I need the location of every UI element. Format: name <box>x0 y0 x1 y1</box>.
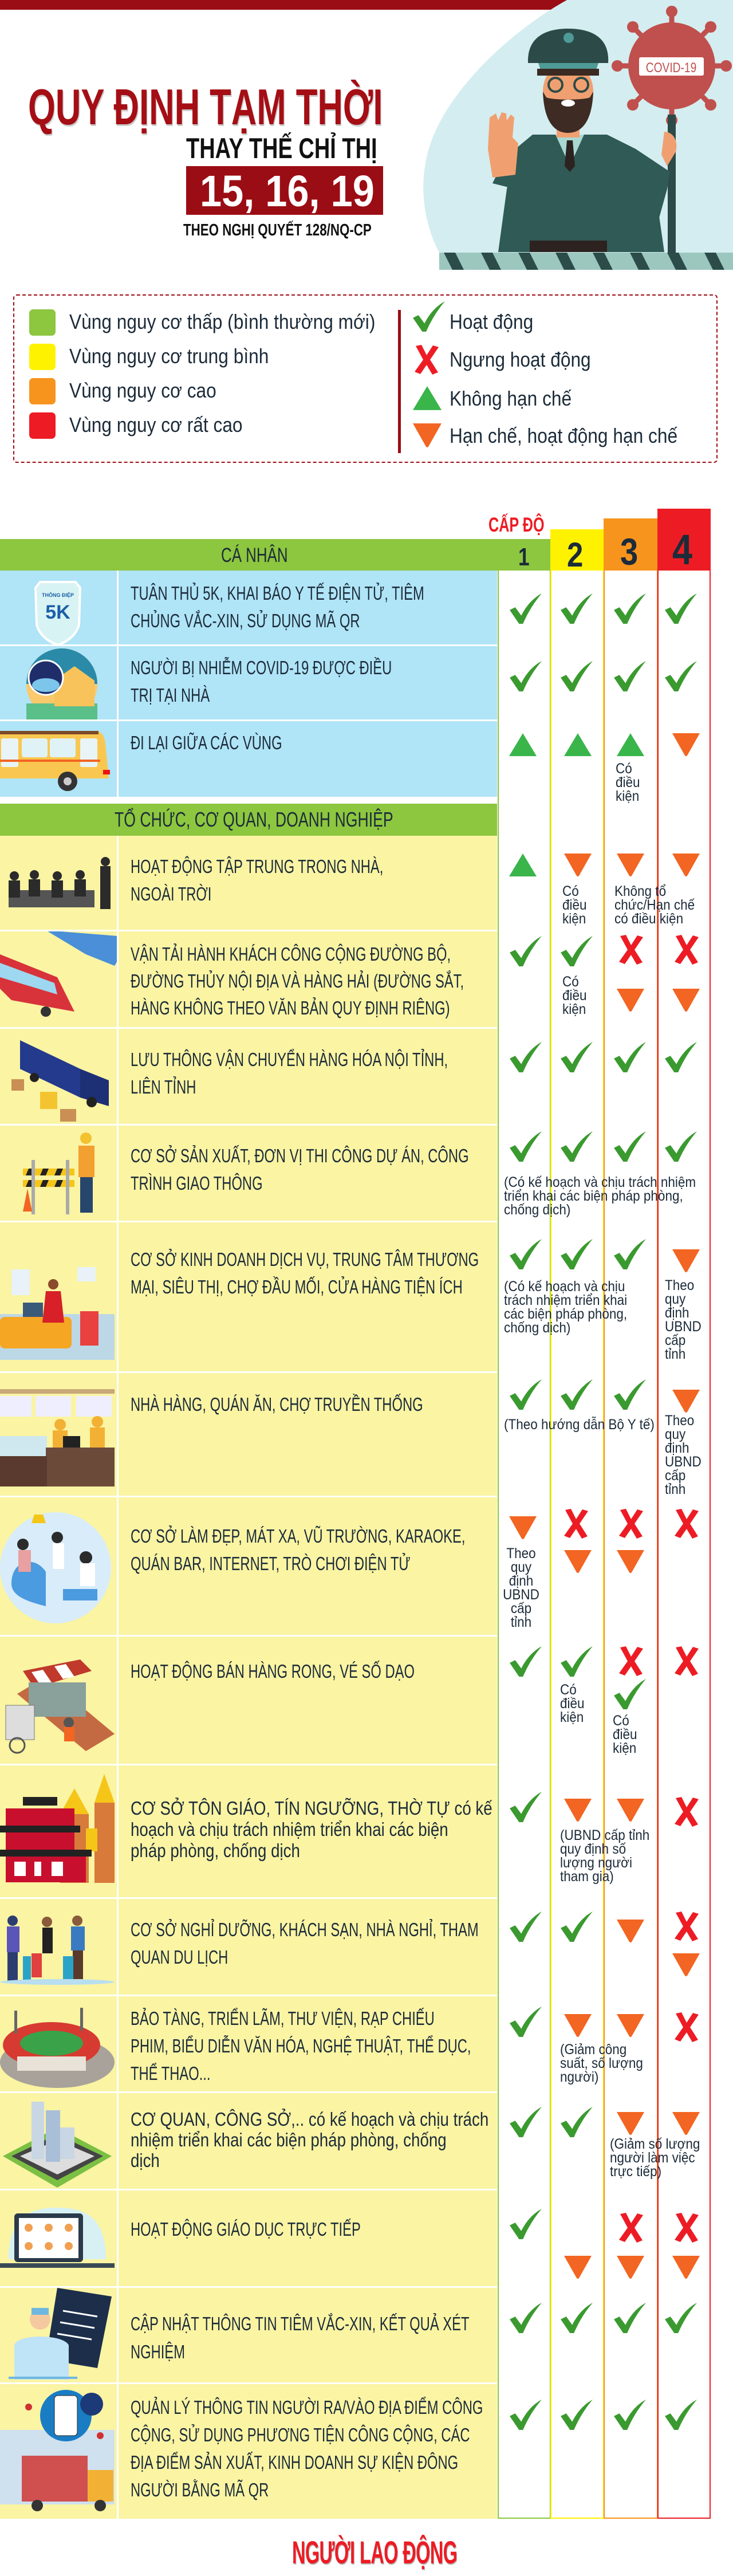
row 9 <box>0 1373 497 1496</box>
marks row 17 <box>510 2303 542 2333</box>
level marks: lượng người <box>560 1855 632 1871</box>
level marks: Có <box>562 974 579 990</box>
text: ĐI LẠI GIỮA CÁC VÙNG <box>131 732 282 753</box>
text: PHIM, BIỂU DIỄN VĂN HÓA, NGHỆ THUẬT, THỂ DỤC, <box>131 2035 471 2056</box>
row 8 <box>0 1222 497 1371</box>
level marks: quy <box>665 1291 685 1307</box>
level marks: quy định số <box>560 1841 626 1857</box>
pole <box>668 115 676 253</box>
row 7 <box>0 1126 497 1221</box>
row 11 <box>0 1637 497 1764</box>
marks row 15 <box>510 2107 542 2137</box>
row 2 <box>0 646 497 719</box>
footer logo: NGƯỜI LAO ĐỘNG <box>292 2534 457 2570</box>
text: CƠ SỞ KINH DOANH DỊCH VỤ, TRUNG TÂM THƯƠNG <box>131 1249 479 1270</box>
level marks: có điều kiện <box>614 911 683 927</box>
text: QUÁN BAR, INTERNET, TRÒ CHƠI ĐIỆN TỬ <box>131 1553 411 1574</box>
icon: travelers <box>0 1916 115 1985</box>
text: 2 <box>567 536 583 574</box>
level marks: tỉnh <box>665 1346 685 1362</box>
level marks: người làm việc <box>610 2150 695 2166</box>
icon: meeting <box>9 857 111 909</box>
icon: online class <box>0 2208 115 2268</box>
marks row 8 <box>510 1239 542 1269</box>
icon: beauty salon <box>0 1512 111 1623</box>
level marks: điều <box>562 988 587 1004</box>
level marks: Theo <box>665 1413 694 1429</box>
level marks: (Theo hướng dẫn Bộ Y tế) <box>504 1417 655 1433</box>
marks row 7 <box>510 1131 542 1162</box>
text: NHÀ HÀNG, QUÁN ĂN, CHỢ TRUYỀN THỐNG <box>131 1394 423 1415</box>
belt <box>530 241 607 252</box>
level marks: kiện <box>562 1001 586 1017</box>
text: 4 <box>672 526 692 573</box>
level marks: (UBND cấp tỉnh <box>560 1827 649 1843</box>
marks row 6 <box>510 1042 542 1072</box>
level marks: điều <box>560 1696 585 1712</box>
row 14 <box>0 1996 497 2091</box>
legend: Vùng nguy cơ trung bình <box>69 344 269 368</box>
text: QUAN DU LỊCH <box>131 1946 228 1968</box>
level marks: kiện <box>560 1709 584 1725</box>
text: NGƯỜI BỊ NHIỄM COVID-19 ĐƯỢC ĐIỀU <box>131 657 392 678</box>
icon: 5K shield <box>34 581 81 644</box>
row 12 <box>0 1765 497 1897</box>
section header: cá nhân: CÁ NHÂN <box>221 544 288 567</box>
level header: CẤP ĐỘ <box>488 514 545 536</box>
level marks: (Giảm công <box>560 2042 626 2058</box>
icon: home treatment <box>26 648 97 719</box>
section header: tổ chức: TỔ CHỨC, CƠ QUAN, DOANH NGHIỆP <box>115 808 393 831</box>
icon: cargo truck <box>11 1040 109 1122</box>
text: ĐỊA ĐIỂM SẢN XUẤT, KINH DOANH SỰ KIỆN ĐÔNG <box>131 2452 458 2473</box>
text: CỘNG, SỬ DỤNG PHƯƠNG TIỆN CÔNG CỘNG, CÁC <box>131 2424 470 2445</box>
level marks: (Có kế hoạch và chịu <box>504 1279 625 1295</box>
top red bar <box>0 0 570 10</box>
marks row 18 <box>510 2400 542 2430</box>
red box numbers: 15, 16, 19 <box>200 167 375 216</box>
level marks: triển khai các biện pháp phòng, <box>504 1188 683 1204</box>
body <box>498 135 664 252</box>
cap <box>528 29 608 63</box>
text: TUÂN THỦ 5K, KHAI BÁO Y TẾ ĐIỆN TỬ, TIÊM <box>131 583 424 604</box>
legend <box>13 294 718 463</box>
text: QUẢN LÝ THÔNG TIN NGƯỜI RA/VÀO ĐỊA ĐIỂM CÔNG <box>131 2397 483 2418</box>
level marks: điều <box>613 1726 637 1743</box>
text: THỂ THAO... <box>131 2063 211 2084</box>
row 16 <box>0 2190 497 2286</box>
level marks: UBND <box>665 1454 702 1470</box>
level marks: Không tổ <box>614 883 666 899</box>
level marks: tỉnh <box>665 1481 685 1497</box>
row 5 <box>0 931 497 1027</box>
text: CHỦNG VẮC-XIN, SỬ DỤNG MÃ QR <box>131 610 360 631</box>
marks row 12 <box>510 1792 542 1822</box>
legend: Vùng nguy cơ rất cao <box>69 413 243 436</box>
level marks: chống dịch) <box>504 1320 570 1336</box>
marks row 4 <box>509 854 537 876</box>
level marks: cấp <box>665 1332 685 1348</box>
row 13 <box>0 1899 497 1995</box>
level marks: trực tiếp) <box>610 2164 661 2180</box>
marks row 9 <box>510 1379 542 1410</box>
right arm <box>636 149 670 241</box>
level marks: quy <box>665 1426 685 1442</box>
icon: religious buildings <box>0 1774 115 1883</box>
text: nhiệm triển khai các biện pháp phòng, chống <box>131 2129 447 2150</box>
text: TRÌNH GIAO THÔNG <box>131 1173 263 1194</box>
level marks: (Giảm số lượng <box>610 2136 700 2152</box>
level marks: cấp <box>665 1468 685 1484</box>
text: CƠ SỞ SẢN XUẤT, ĐƠN VỊ THI CÔNG DỰ ÁN, CÔNG <box>131 1145 469 1166</box>
icon: construction <box>23 1132 94 1214</box>
row 3 <box>0 721 497 797</box>
level marks: tỉnh <box>511 1614 531 1630</box>
text: VẬN TẢI HÀNH KHÁCH CÔNG CỘNG ĐƯỜNG BỘ, <box>131 943 451 965</box>
marks row 5 <box>510 936 542 966</box>
level marks: Có <box>616 761 632 777</box>
level marks: kiện <box>616 788 639 804</box>
header illustration: COVID-19 <box>646 60 696 76</box>
legend: Hạn chế, hoạt động hạn chế <box>450 424 677 447</box>
text: LIÊN TỈNH <box>131 1076 196 1098</box>
text: NGHIỆM <box>131 2341 185 2362</box>
level marks: định <box>509 1573 533 1589</box>
level marks: chức/Hạn chế <box>614 897 695 913</box>
text: HÀNG KHÔNG THEO VĂN BẢN QUY ĐỊNH RIÊNG) <box>131 997 450 1018</box>
level marks: (Có kế hoạch và chịu trách nhiệm <box>504 1174 696 1190</box>
marks row 13 <box>510 1912 542 1942</box>
marks row 2 <box>510 661 542 691</box>
text: 3 <box>620 530 638 573</box>
row 10 <box>0 1497 497 1635</box>
legend: Không hạn chế <box>450 387 572 410</box>
level marks: Có <box>560 1682 577 1698</box>
row 18 <box>0 2384 497 2519</box>
icon: street vendors <box>6 1659 115 1754</box>
icon: office buildings <box>3 2102 112 2188</box>
legend labels: Vùng nguy cơ thấp (bình thường mới) <box>69 310 375 333</box>
legend: Ngưng hoạt động <box>450 348 591 371</box>
level marks: các biện pháp phòng, <box>504 1306 627 1322</box>
icon: bus <box>0 731 110 791</box>
icon: QR and truck <box>0 2390 115 2511</box>
icon: restaurant <box>0 1389 115 1486</box>
level marks: người) <box>560 2069 598 2085</box>
marks row 10 <box>509 1516 537 1539</box>
text: dịch <box>131 2150 160 2171</box>
level marks: kiện <box>562 911 586 927</box>
text: LƯU THÔNG VẬN CHUYỂN HÀNG HÓA NỘI TỈNH, <box>131 1049 448 1070</box>
text: CƠ SỞ LÀM ĐẸP, MÁT XA, VŨ TRƯỜNG, KARAOKE, <box>131 1525 465 1547</box>
marks row 11 <box>510 1646 542 1677</box>
row 15 <box>0 2093 497 2189</box>
text: CƠ QUAN, CÔNG SỞ,.. có kế hoạch và chịu trách <box>131 2109 488 2130</box>
text: hoạch và chịu trách nhiệm triển khai các biện <box>131 1819 448 1840</box>
text: pháp phòng, chống dịch <box>131 1840 300 1861</box>
level marks: suất, số lượng <box>560 2055 643 2071</box>
header illustration <box>0 0 733 270</box>
row 4 <box>0 836 497 930</box>
left arm and hand <box>492 149 524 189</box>
text: CƠ SỞ TÔN GIÁO, TÍN NGƯỠNG, THỜ TỰ có kế <box>131 1798 492 1819</box>
level marks: UBND <box>503 1587 539 1603</box>
icon: vaccine record <box>9 2288 112 2380</box>
legend swatches <box>29 309 56 336</box>
level marks: tham gia) <box>560 1869 614 1885</box>
section header: tổ chức <box>0 804 497 836</box>
legend: Vùng nguy cơ cao <box>69 379 216 402</box>
text: HOẠT ĐỘNG TẬP TRUNG TRONG NHÀ, <box>131 856 383 877</box>
barrier <box>439 253 733 270</box>
level marks: Theo <box>665 1277 694 1293</box>
level marks: Có <box>562 883 579 899</box>
level marks: định <box>665 1305 689 1321</box>
text: NGOÀI TRỜI <box>131 883 211 904</box>
virus sign <box>612 6 732 126</box>
level marks: cấp <box>511 1600 531 1617</box>
resolution note: THEO NGHỊ QUYẾT 128/NQ-CP <box>183 221 372 239</box>
text: MẠI, SIÊU THỊ, CHỢ ĐẦU MỐI, CỬA HÀNG TIỆN ÍCH <box>131 1276 463 1297</box>
level marks: kiện <box>613 1740 636 1756</box>
level marks: UBND <box>665 1319 702 1335</box>
level marks: trách nhiệm triển khai <box>504 1292 627 1308</box>
marks row 3 <box>509 733 537 756</box>
level numbers: 1 <box>518 543 530 571</box>
level marks: định <box>665 1440 689 1456</box>
text: HOẠT ĐỘNG GIÁO DỤC TRỰC TIẾP <box>131 2219 361 2240</box>
text: BẢO TÀNG, TRIỂN LÃM, THƯ VIỆN, RẠP CHIẾU <box>131 2008 435 2029</box>
level columns <box>498 571 551 2519</box>
level marks: chống dịch) <box>504 1202 570 1218</box>
icon: 5K shield: 5K <box>45 601 70 623</box>
icon: 5K shield: THÔNG ĐIỆP <box>42 592 74 598</box>
text: TRỊ TẠI NHÀ <box>131 685 210 706</box>
level marks: điều <box>562 897 587 913</box>
text: ĐƯỜNG THỦY NỘI ĐỊA VÀ HÀNG HẢI (ĐƯỜNG SẮT, <box>131 970 464 992</box>
section header: cá nhân <box>0 539 550 571</box>
text: CẬP NHẬT THÔNG TIN TIÊM VẮC-XIN, KẾT QUẢ XÉT <box>131 2313 469 2334</box>
marks row 16 <box>510 2209 542 2239</box>
row 6 <box>0 1029 497 1124</box>
row 1 <box>0 571 497 644</box>
icon: stadium <box>0 2008 115 2088</box>
level marks: điều <box>616 774 640 791</box>
level marks: Theo <box>506 1545 536 1562</box>
title: QUY ĐỊNH TẠM THỜI <box>28 78 383 135</box>
marks row 14 <box>510 2007 542 2037</box>
level marks: Có <box>613 1713 629 1729</box>
row 17 <box>0 2288 497 2382</box>
subtitle: THAY THẾ CHỈ THỊ <box>186 132 377 164</box>
icon: shop <box>0 1267 115 1360</box>
level marks: quy <box>511 1559 531 1575</box>
marks row 1 <box>510 593 542 624</box>
legend: Hoạt động <box>450 310 533 333</box>
text: NGƯỜI BẰNG MÃ QR <box>131 2479 269 2500</box>
icon: public transport <box>0 931 117 1017</box>
head <box>557 115 580 137</box>
text: HOẠT ĐỘNG BÁN HÀNG RONG, VÉ SỐ DẠO <box>131 1661 415 1682</box>
text: CƠ SỞ NGHỈ DƯỠNG, KHÁCH SẠN, NHÀ NGHỈ, THAM <box>131 1919 479 1940</box>
